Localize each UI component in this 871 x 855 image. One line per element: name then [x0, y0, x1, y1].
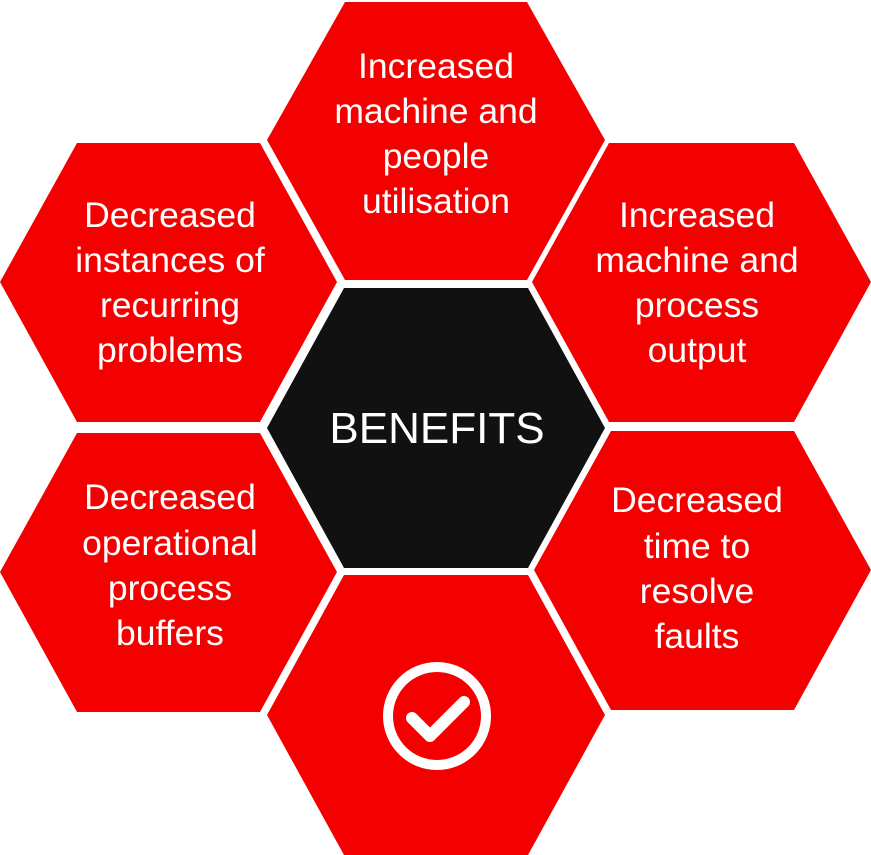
hex: left top: recurring [100, 285, 240, 325]
hex: top: Increased [358, 46, 514, 86]
hex: right bottom [534, 431, 871, 710]
hex: left top [0, 143, 337, 422]
hex: top: utilisation [362, 181, 510, 221]
hex: left top: Decreased [84, 195, 256, 235]
hex: left top: problems [97, 330, 243, 370]
hex: left bottom [0, 433, 337, 712]
hex: right top: machine and [595, 240, 799, 280]
hex: left top: instances of [75, 240, 265, 280]
hex: right top [532, 143, 871, 422]
hex: right top: output [648, 330, 746, 370]
hex: left bottom: process [108, 568, 232, 608]
hex: left bottom: operational [82, 523, 258, 563]
hex: right bottom: resolve [640, 571, 754, 611]
hex: right bottom: Decreased [611, 480, 783, 520]
hex: right top: Increased [619, 195, 775, 235]
hex: right top: process [635, 285, 759, 325]
hex: right bottom: faults [655, 616, 739, 656]
hex: top: machine and [334, 91, 538, 131]
hex: center BENEFITS [267, 288, 605, 568]
icon: check circle [388, 667, 486, 765]
hex: left bottom: buffers [116, 613, 224, 653]
hex: bottom with check icon [267, 575, 605, 855]
hex: right bottom: time to [644, 526, 750, 566]
hex: left bottom: Decreased [84, 477, 256, 517]
hex: top: people [383, 136, 489, 176]
hex: top [267, 2, 605, 280]
hex: center BENEFITS: BENEFITS [329, 404, 545, 453]
